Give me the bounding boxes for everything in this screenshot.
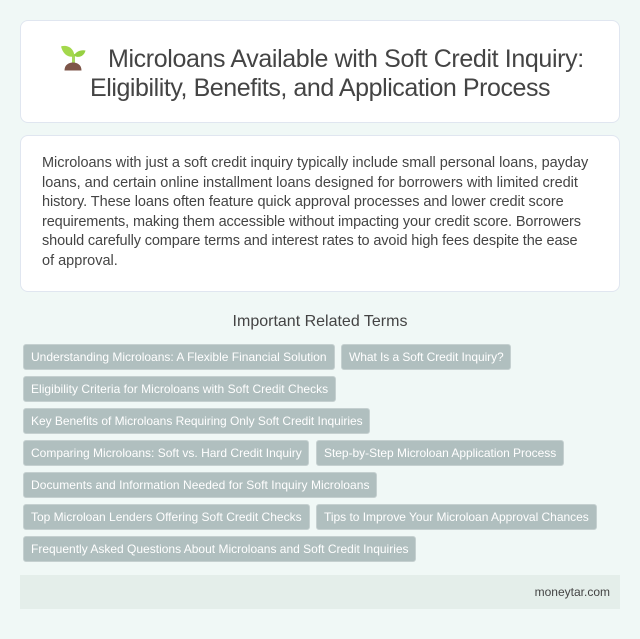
tag (23, 472, 377, 498)
tag: Step-by-Step Microloan Application Process (324, 446, 556, 460)
text block: summary paragraph: requirements, making them accessible without impacting your credit score. Borrowers (42, 214, 581, 230)
text block: summary paragraph (42, 155, 588, 269)
heading: title (90, 45, 584, 102)
tag (23, 536, 416, 562)
text block: summary paragraph: of approval. (42, 253, 118, 269)
icon: seedling (61, 46, 86, 70)
text block: summary paragraph: history. These loans often feature quick approval processes and lower credit score (42, 194, 564, 210)
text block: summary paragraph: should carefully compare terms and interest rates to avoid high fees despite the ease (42, 233, 577, 249)
footer text: moneytar.com: moneytar.com (535, 585, 610, 599)
tag (316, 504, 597, 530)
tag: Key Benefits of Microloans Requiring Only Soft Credit Inquiries (31, 414, 363, 428)
tag: Documents and Information Needed for Soft Inquiry Microloans (31, 478, 370, 492)
tag: Comparing Microloans: Soft vs. Hard Credit Inquiry (31, 446, 302, 460)
heading: title: Microloans Available with Soft Credit Inquiry: (108, 45, 584, 73)
text block: summary paragraph: Microloans with just a soft credit inquiry typically include small personal loans, payday (42, 155, 588, 171)
tag (316, 440, 564, 466)
heading: important related terms: Important Related Terms (233, 313, 407, 330)
panel: summary card (20, 135, 620, 292)
footer bar (20, 575, 620, 609)
tag: Frequently Asked Questions About Microloans and Soft Credit Inquiries (31, 542, 409, 556)
tag (23, 376, 336, 402)
tag (23, 408, 370, 434)
tag: What Is a Soft Credit Inquiry? (349, 350, 504, 364)
tag: Eligibility Criteria for Microloans with Soft Credit Checks (31, 382, 328, 396)
tag: Top Microloan Lenders Offering Soft Credit Checks (31, 510, 302, 524)
tag (23, 440, 309, 466)
text block: summary paragraph: loans, and certain online installment loans designed for borrowers with limited credit (42, 175, 578, 191)
tag (23, 504, 310, 530)
heading: title: Eligibility, Benefits, and Application Process (90, 74, 550, 102)
panel: title card (20, 20, 620, 123)
tag: Understanding Microloans: A Flexible Financial Solution (31, 350, 326, 364)
tag (23, 344, 335, 370)
panel: related term tags (23, 344, 597, 562)
tag: Tips to Improve Your Microloan Approval Chances (324, 510, 589, 524)
tag (341, 344, 511, 370)
